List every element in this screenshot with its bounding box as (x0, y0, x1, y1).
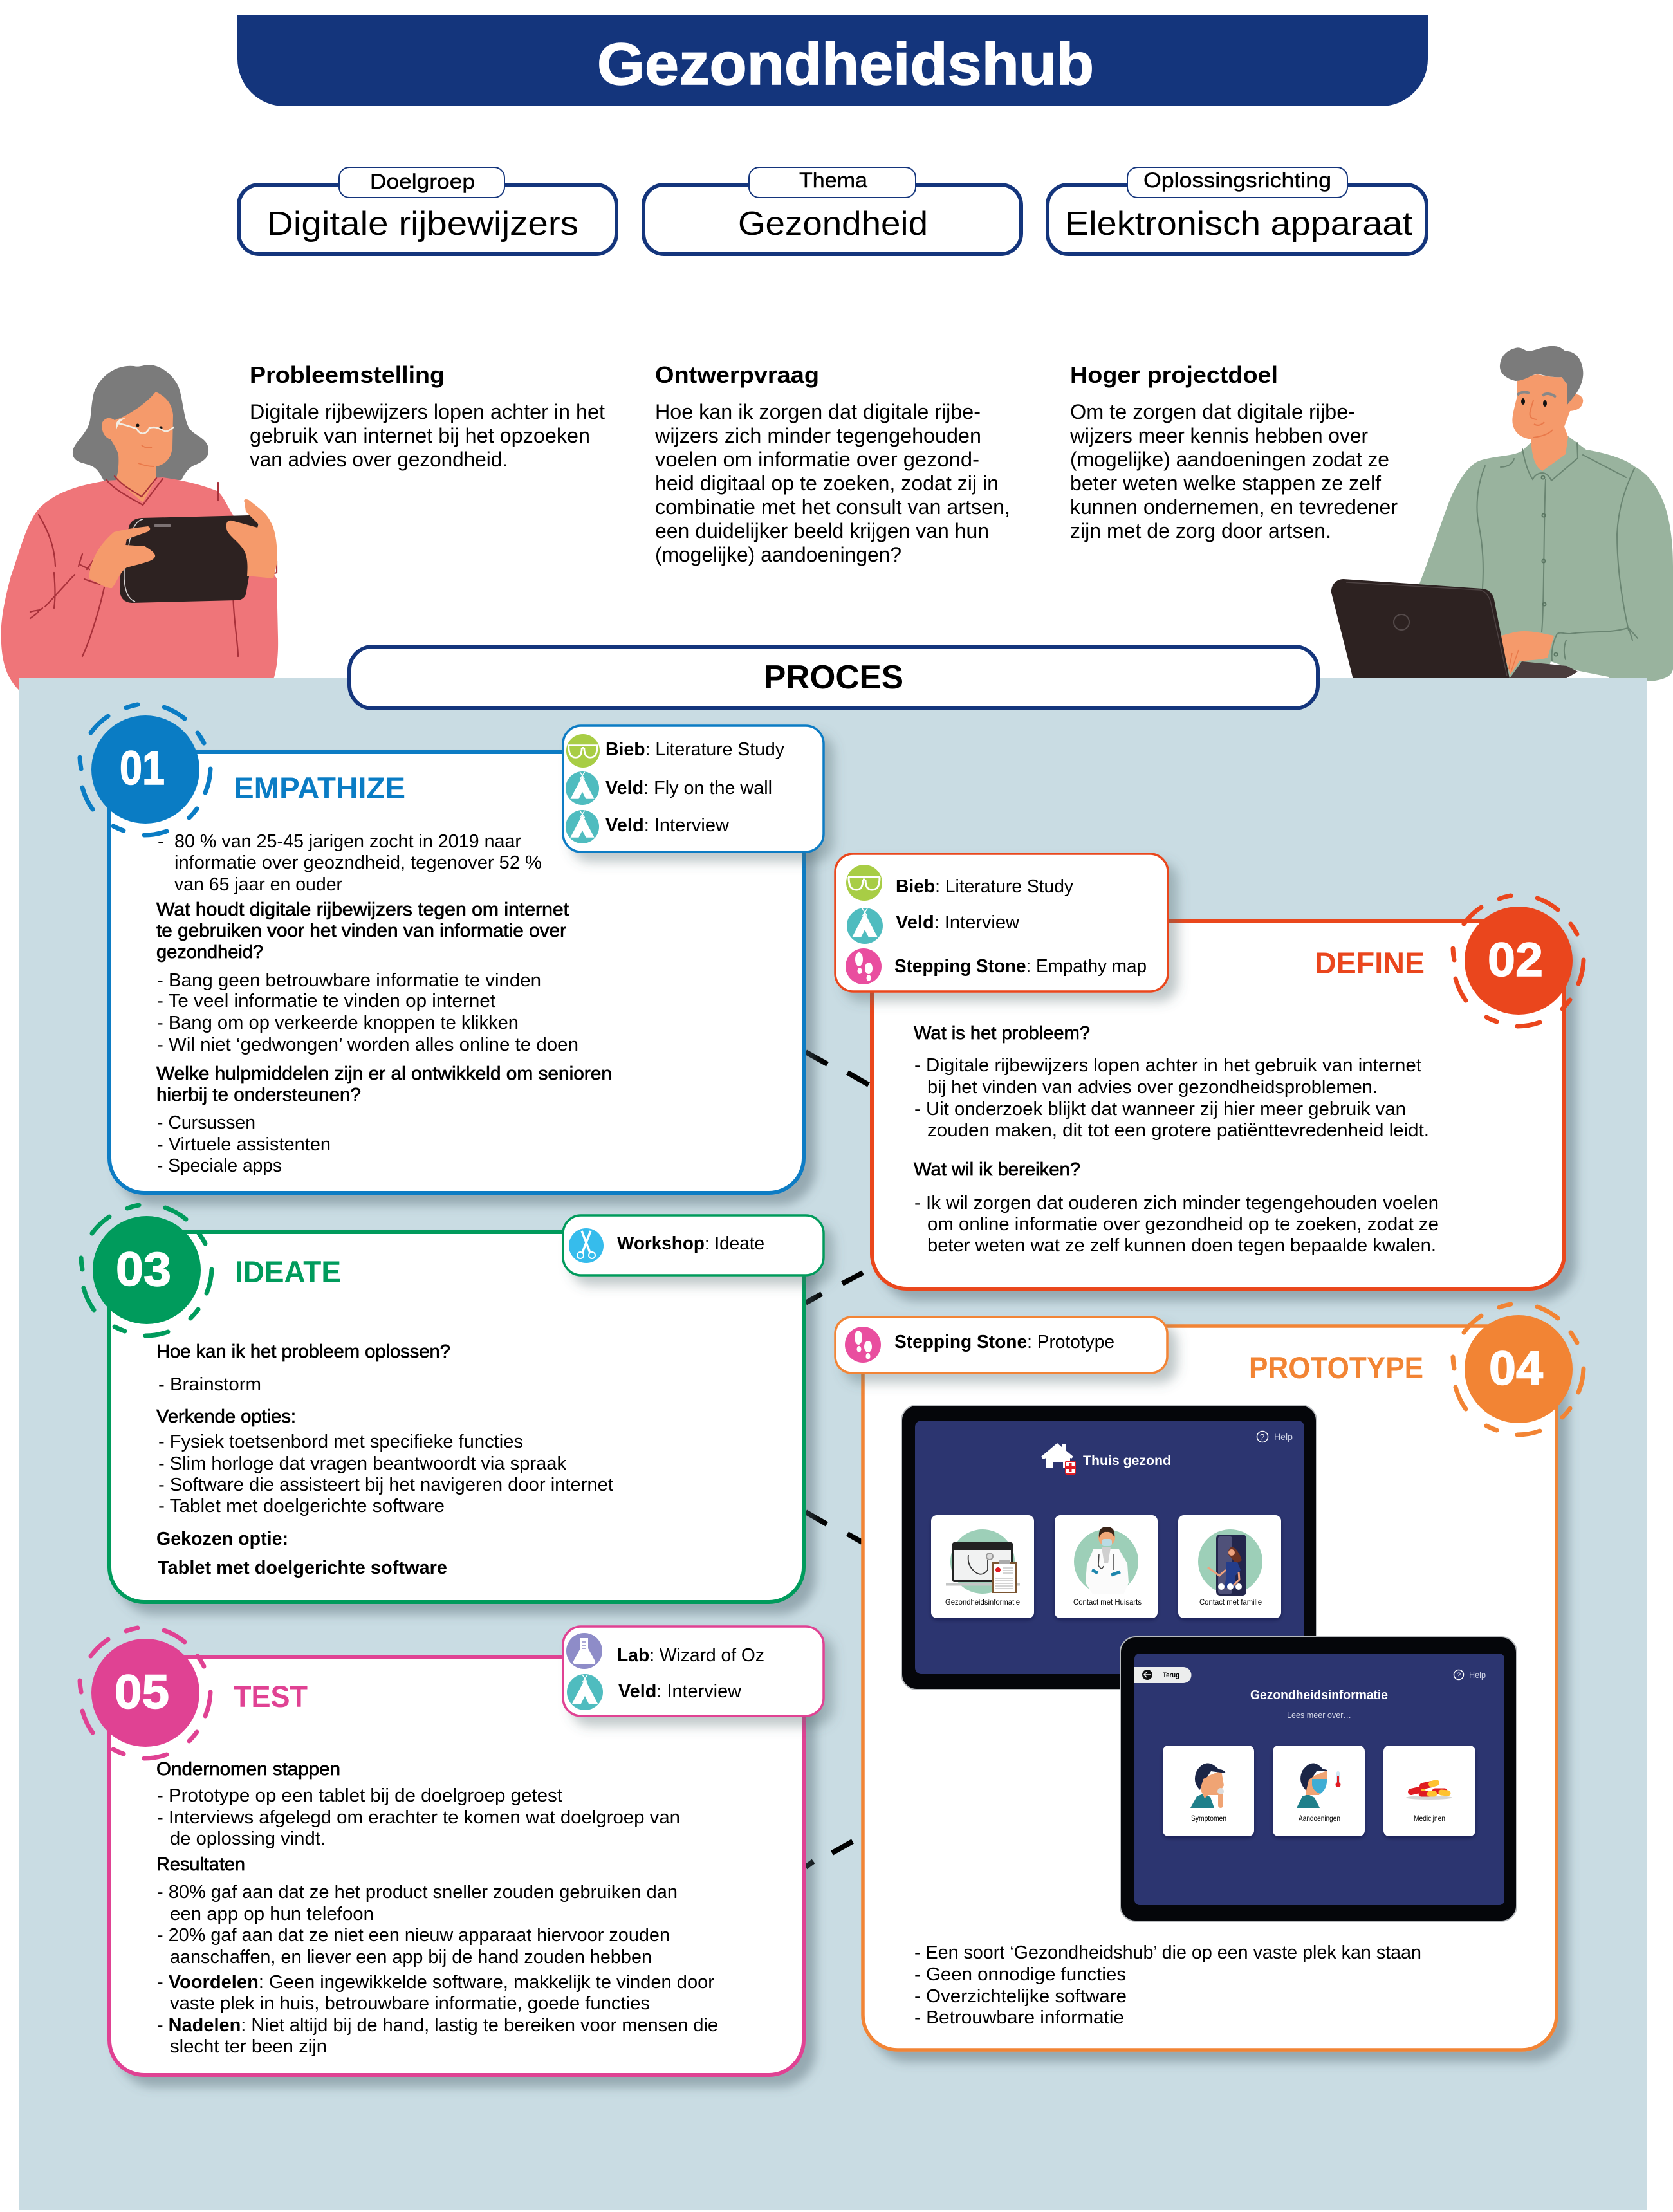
app card: Medicijnen: Medicijnen (1414, 1814, 1445, 1823)
step badge 04 (1453, 1304, 1584, 1435)
text block: Ontwerpvraag: voelen om informatie over gezond- (655, 448, 979, 471)
text block: Ontwerpvraag: wijzers zich minder tegengehouden (654, 424, 981, 447)
methods tag: test: Lab: Wizard of Oz (617, 1645, 764, 1666)
heading: EMPATHIZE: EMPATHIZE (234, 771, 405, 805)
heading: PROCES: PROCES (764, 659, 903, 696)
text block: empathize findings: Welke hulpmiddelen zijn er al ontwikkeld om senioren (156, 1064, 612, 1084)
text block: test content: - Interviews afgelegd om erachter te komen wat doelgroep van (157, 1807, 680, 1828)
text block: empathize findings: - Te veel informatie te vinden op internet (157, 991, 495, 1011)
tablet: health information screen (1120, 1637, 1517, 1921)
text block: ideate content: Gekozen optie: (156, 1529, 288, 1549)
text block: ideate content: - Slim horloge dat vragen beantwoordt via spraak (158, 1453, 566, 1474)
text block: define content: om online informatie over gezondheid op te zoeken, zodat ze (927, 1214, 1439, 1235)
text block: Hoger projectdoel (1069, 362, 1398, 542)
help button (1257, 1431, 1293, 1442)
text block: Probleemstelling: gebruik van internet bij het opzoeken (250, 424, 590, 447)
text block: Hoger projectdoel: (mogelijke) aandoeningen zodat ze (1070, 448, 1389, 471)
heading: PROTOTYPE: PROTOTYPE (1249, 1350, 1423, 1385)
text block: test content: de oplossing vindt. (170, 1829, 326, 1849)
methods tag: define: Bieb: Literature Study (896, 876, 1073, 897)
text block: test content: - 20% gaf aan dat ze niet een nieuw apparaat hiervoor zouden (157, 1925, 670, 1946)
arrow: ideate to prototype (806, 1512, 862, 1542)
text block: empathize findings: - Speciale apps (157, 1156, 282, 1176)
help button: Help (1469, 1670, 1486, 1680)
text block: test content: een app op hun telefoon (170, 1904, 374, 1924)
text block: empathize findings: 80 % van 25-45 jarigen zocht in 2019 naar (174, 831, 521, 852)
app card: Contact met familie (1178, 1515, 1281, 1618)
text block: prototype features: - Overzichtelijke software (914, 1986, 1127, 2007)
text block: prototype features (914, 1942, 1421, 2028)
text block: Hoger projectdoel: Om te zorgen dat digitale rijbe- (1070, 400, 1355, 423)
text block: Hoger projectdoel: Hoger projectdoel (1070, 362, 1278, 388)
step badge 01 (80, 705, 210, 835)
app card: Gezondheidsinformatie: Gezondheidsinformatie (945, 1598, 1020, 1607)
text block: empathize findings: - Wil niet ‘gedwongen’ worden alles online te doen (157, 1035, 578, 1055)
text block: define content: Wat is het probleem? (914, 1023, 1090, 1044)
app card: Medicijnen (1383, 1746, 1475, 1836)
label box: Doelgroep (239, 167, 616, 254)
heading: PROCES (349, 647, 1318, 708)
help button: ? (1457, 1672, 1461, 1679)
heading: TEST: TEST (234, 1679, 308, 1713)
text block: Ontwerpvraag: (mogelijke) aandoeningen? (655, 543, 901, 566)
text block: define content: - Uit onderzoek blijkt dat wanneer zij hier meer gebruik van (914, 1099, 1406, 1120)
text block: prototype features: - Betrouwbare informatie (914, 2007, 1124, 2028)
text block: Hoger projectdoel: zijn met de zorg door artsen. (1070, 519, 1331, 542)
text block: define content: beter weten wat ze zelf kunnen doen tegen bepaalde kwalen. (927, 1235, 1436, 1256)
tablet: home screen (901, 1405, 1317, 1690)
text block: ideate content: - Brainstorm (158, 1374, 261, 1395)
label box: Oplossingsrichting (1048, 167, 1427, 254)
text block: empathize findings: - (158, 831, 164, 852)
text block: empathize findings: gezondheid? (156, 942, 263, 963)
text block: Ontwerpvraag: Ontwerpvraag (655, 362, 819, 388)
text block: test content: aanschaffen, en liever een app bij de hand zouden hebben (170, 1947, 652, 1968)
text block: test content: Resultaten (156, 1854, 245, 1875)
text block: define content: bij het vinden van advies over gezondheidsproblemen. (927, 1077, 1378, 1098)
label box: Thema: Thema (799, 169, 867, 192)
arrow: empathize to define (806, 1052, 869, 1085)
text block: prototype features: - Geen onnodige functies (914, 1964, 1126, 1985)
title banner (237, 15, 1428, 106)
text block: empathize findings: Wat houdt digitale rijbewijzers tegen om internet (156, 899, 569, 920)
illustration: woman with tablet (1, 365, 278, 696)
methods tag: ideate: Workshop: Ideate (617, 1233, 764, 1254)
step badge 05: 05 (115, 1665, 169, 1719)
heading: IDEATE: IDEATE (235, 1255, 341, 1289)
text block: Hoger projectdoel: kunnen ondernemen, en tevredener (1070, 495, 1398, 519)
text block: test content: slecht ter been zijn (170, 2036, 327, 2057)
text block: test content: Ondernomen stappen (156, 1759, 340, 1780)
text block: empathize findings: informatie over geozndheid, tegenover 52 % (174, 853, 542, 873)
title banner: Gezondheidshub (597, 32, 1094, 97)
text block: define content: Wat wil ik bereiken? (914, 1159, 1080, 1180)
app logo: Thuis gezond (1083, 1453, 1171, 1468)
text block: empathize findings (156, 831, 612, 1176)
help button: Help (1274, 1432, 1293, 1442)
app card: Symptomen: Symptomen (1191, 1814, 1226, 1823)
illustration: man with laptop (1331, 346, 1673, 682)
arrow: ideate to define (806, 1273, 863, 1303)
text block: test content: vaste plek in huis, betrouwbare informatie, goede functies (170, 1993, 650, 2014)
step badge 03 (81, 1205, 212, 1336)
text block: empathize findings: van 65 jaar en ouder (174, 874, 342, 895)
text block: Probleemstelling: Probleemstelling (250, 362, 445, 388)
methods tag: prototype: Stepping Stone: Prototype (894, 1332, 1114, 1352)
text block: Ontwerpvraag: combinatie met het consult van artsen, (655, 495, 1010, 519)
text block: define content: - Ik wil zorgen dat ouderen zich minder tegengehouden voelen (914, 1193, 1439, 1213)
text block: prototype features: - Een soort ‘Gezondheidshub’ die op een vaste plek kan staan (914, 1942, 1421, 1963)
panel: 05 test (80, 1627, 824, 2075)
text block: ideate content: - Software die assisteert bij het navigeren door internet (158, 1475, 613, 1495)
arrow: test to prototype (806, 1841, 853, 1867)
text block: test content (156, 1759, 718, 2057)
screen title: Gezondheidsinformatie (1250, 1688, 1388, 1702)
text block: empathize findings: - Cursussen (157, 1112, 255, 1133)
panel: 04 prototype (835, 1304, 1584, 2050)
step badge 04: 04 (1489, 1341, 1543, 1395)
methods tag: define: Stepping Stone: Empathy map (894, 956, 1147, 977)
app card: Aandoeningen (1273, 1746, 1365, 1836)
methods tag: empathize (563, 726, 824, 852)
methods tag: define (835, 854, 1168, 991)
text block: ideate content: - Tablet met doelgerichte software (158, 1496, 445, 1516)
text block: ideate content: - Fysiek toetsenbord met specifieke functies (158, 1432, 523, 1452)
text block: Hoger projectdoel: beter weten welke stappen ze zelf (1070, 472, 1381, 495)
label box: Oplossingsrichting: Oplossingsrichting (1143, 169, 1331, 192)
app card: Contact met familie: Contact met familie (1199, 1598, 1262, 1607)
text block: empathize findings: - Virtuele assistenten (157, 1134, 331, 1155)
step badge 01: 01 (120, 741, 165, 795)
methods tag: ideate (563, 1215, 824, 1275)
text block: test content: - Prototype op een tablet bij de doelgroep getest (157, 1785, 562, 1806)
text block: Ontwerpvraag: een duidelijker beeld krijgen van hun (655, 519, 989, 542)
methods tag: prototype (835, 1317, 1167, 1373)
text block: empathize findings: hierbij te ondersteunen? (156, 1085, 361, 1105)
app logo (1041, 1443, 1171, 1474)
text block: empathize findings: - Bang om op verkeerde knoppen te klikken (157, 1013, 519, 1033)
help button: ? (1260, 1432, 1264, 1442)
app card: Aandoeningen: Aandoeningen (1299, 1814, 1340, 1823)
step badge 05 (80, 1628, 210, 1758)
help button (1454, 1670, 1486, 1680)
heading: DEFINE: DEFINE (1315, 946, 1425, 980)
panel: 01 empathize (80, 705, 824, 1193)
step badge 02 (1453, 896, 1584, 1026)
text block: ideate content (156, 1341, 613, 1578)
text block: empathize findings: te gebruiken voor het vinden van informatie over (156, 921, 566, 941)
text block: Probleemstelling: van advies over gezondheid. (250, 448, 508, 471)
label box: Thema: Gezondheid (738, 205, 928, 243)
app card: Gezondheidsinformatie (931, 1515, 1034, 1618)
methods tag: define: Veld: Interview (896, 912, 1020, 933)
text block: define content: - Digitale rijbewijzers lopen achter in het gebruik van internet (914, 1055, 1421, 1076)
text block: define content (914, 1023, 1439, 1256)
text block: ideate content: Verkende opties: (156, 1406, 296, 1427)
methods tag: empathize: Veld: Interview (605, 815, 730, 836)
label box: Oplossingsrichting: Elektronisch apparaat (1065, 205, 1413, 243)
methods tag: test (563, 1627, 824, 1716)
methods tag: test: Veld: Interview (618, 1681, 742, 1702)
label box: Doelgroep: Doelgroep (370, 170, 475, 193)
text block: test content: - Nadelen: Niet altijd bij de hand, lastig te bereiken voor mensen die (157, 2015, 718, 2036)
text block: empathize findings: - Bang geen betrouwbare informatie te vinden (157, 970, 541, 991)
back button: Terug (1163, 1672, 1179, 1679)
text block: test content: - 80% gaf aan dat ze het product sneller zouden gebruiken dan (157, 1882, 678, 1903)
app card: Contact met Huisarts (1055, 1515, 1158, 1618)
app card: Contact met Huisarts: Contact met Huisarts (1073, 1598, 1142, 1607)
text block: ideate content: Tablet met doelgerichte software (158, 1558, 447, 1578)
text block: define content: zouden maken, dit tot een grotere patiënttevredenheid leidt. (927, 1120, 1429, 1141)
text block: ideate content: Hoe kan ik het probleem oplossen? (156, 1341, 450, 1362)
app card: Symptomen (1163, 1746, 1254, 1836)
label box: Thema (643, 167, 1021, 254)
text block: Ontwerpvraag: Hoe kan ik zorgen dat digitale rijbe- (655, 400, 981, 423)
panel: 03 ideate (81, 1205, 824, 1602)
step badge 02: 02 (1488, 933, 1543, 986)
step badge 03: 03 (116, 1242, 171, 1296)
label box: Doelgroep: Digitale rijbewijzers (267, 205, 578, 243)
methods tag: empathize: Bieb: Literature Study (605, 739, 784, 760)
text block: Probleemstelling (250, 362, 605, 471)
panel: process background (19, 678, 1647, 2210)
text block: Ontwerpvraag: heid digitaal op te zoeken, zodat zij in (655, 472, 999, 495)
back button (1134, 1667, 1192, 1683)
panel: 02 define (835, 854, 1584, 1289)
methods tag: empathize: Veld: Fly on the wall (605, 778, 772, 798)
text block: Hoger projectdoel: wijzers meer kennis hebben over (1069, 424, 1368, 447)
text block: Ontwerpvraag (654, 362, 1010, 566)
screen subtitle: Lees meer over… (1287, 1710, 1351, 1720)
text block: test content: - Voordelen: Geen ingewikkelde software, makkelijk te vinden door (157, 1972, 714, 1993)
text block: Probleemstelling: Digitale rijbewijzers lopen achter in het (250, 400, 605, 423)
